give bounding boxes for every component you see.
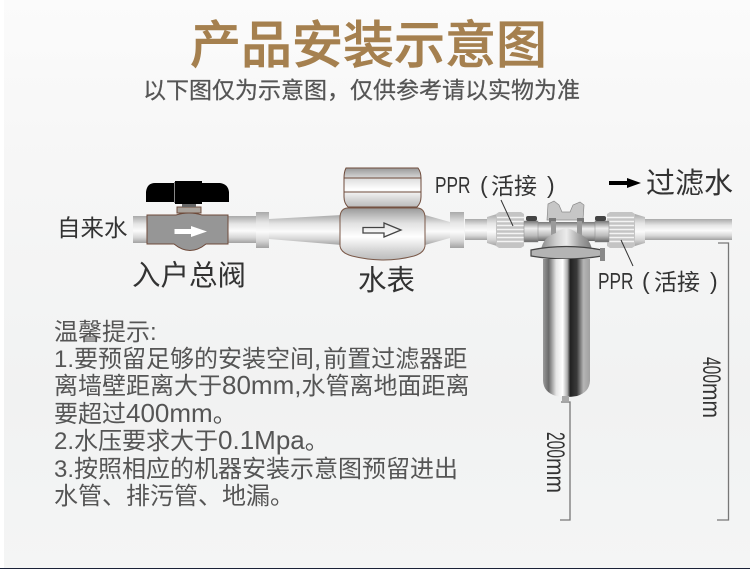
label: tap water: 自来水 xyxy=(57,215,128,241)
left PPR union xyxy=(465,212,524,248)
label: filtered water: 过滤水 xyxy=(646,168,733,200)
label: main valve: 入户总阀 xyxy=(132,260,246,292)
title: 产品安装示意图 xyxy=(190,17,547,74)
label: PPR union left xyxy=(435,172,555,199)
dimension label 200mm: mm xyxy=(541,458,569,493)
pipe to meter xyxy=(269,215,342,245)
tips text block: 水管、排污管、地漏。 xyxy=(54,483,294,510)
label: PPR union left: ) xyxy=(547,172,555,198)
label: PPR union right: ( xyxy=(642,268,650,294)
inlet pipe xyxy=(133,216,148,243)
tips text block: 3.按照相应的机器安装示意图预留进出 xyxy=(54,456,458,483)
dimension: 200mm xyxy=(560,402,570,520)
main valve xyxy=(146,181,269,250)
tips text block: 温馨提示: xyxy=(54,318,157,346)
tips text block: 离墙壁距离大于80mm,水管离地面距离 xyxy=(54,370,469,400)
tips text block: 要超过400mm。 xyxy=(54,398,237,428)
dimension label 200mm: 200 xyxy=(541,432,569,458)
label: PPR union right: PPR xyxy=(598,268,633,294)
tips text block xyxy=(54,318,469,510)
dimension label 400mm: mm xyxy=(697,383,725,418)
tips text block: 1.要预留足够的安装空间,前置过滤器距 xyxy=(54,343,467,373)
tips text block: 2.水压要求大于0.1Mpa。 xyxy=(54,425,329,455)
dimension label 200mm xyxy=(541,432,569,493)
filter xyxy=(524,201,609,401)
right PPR union xyxy=(607,212,732,248)
label: PPR union right xyxy=(598,268,718,295)
pointer lines xyxy=(501,200,633,266)
subtitle: 以下图仅为示意图，仅供参考请以实物为准 xyxy=(143,76,580,102)
water meter xyxy=(340,168,464,260)
label: PPR union left: PPR xyxy=(435,172,470,198)
flow arrow xyxy=(609,178,641,188)
dimension label 400mm xyxy=(697,357,725,418)
label: PPR union left: ( xyxy=(480,172,488,198)
label: PPR union right: ) xyxy=(710,268,718,294)
label: PPR union left: 活接 xyxy=(491,173,537,199)
label: water meter: 水表 xyxy=(358,265,415,297)
label: PPR union right: 活接 xyxy=(654,269,700,295)
dimension label 400mm: 400 xyxy=(697,357,725,383)
dimension: 400mm xyxy=(717,243,728,520)
